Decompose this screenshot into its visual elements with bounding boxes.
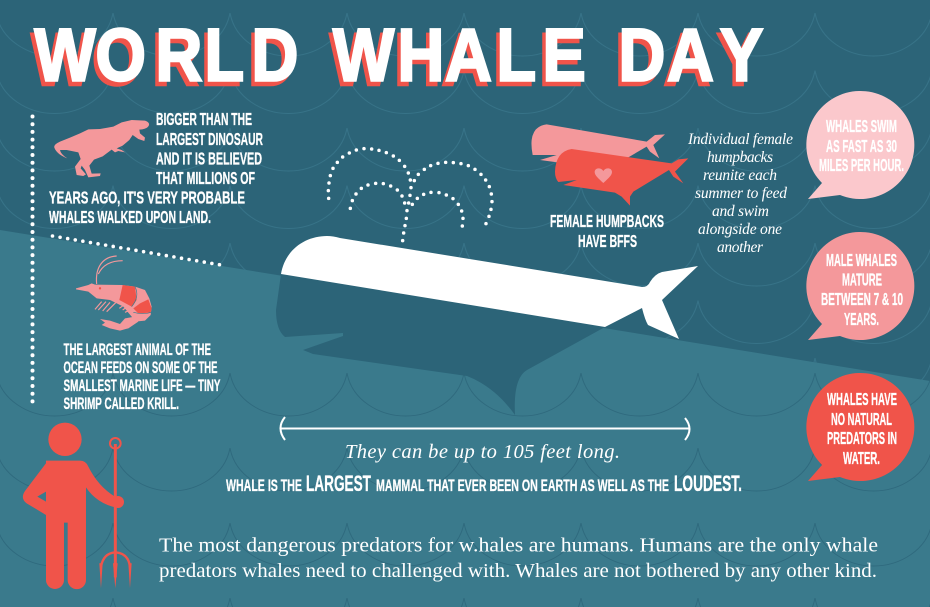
text: dinosaur fact xyxy=(49,109,263,227)
text: dinosaur fact: WHALES WALKED UPON LAND. xyxy=(49,207,211,227)
text: dinosaur fact: BIGGER THAN THE xyxy=(156,109,252,129)
bubble: maturity xyxy=(806,232,914,340)
text: largest mammal line: LARGEST xyxy=(306,471,371,496)
icon: two whales with heart xyxy=(531,124,688,206)
text: italic humpback note: reunite each xyxy=(703,167,777,184)
bubble: no predators xyxy=(806,373,914,481)
whale back and tail xyxy=(281,236,698,339)
text: predators paragraph: predators whales need to challenged with. Whales are not bothered by any other kind. xyxy=(159,560,877,582)
text: dinosaur fact: LARGEST DINOSAUR xyxy=(156,129,263,149)
text: italic humpback note: humpbacks xyxy=(707,149,773,166)
text: krill fact xyxy=(64,341,220,413)
title xyxy=(31,13,763,101)
whale belly xyxy=(276,274,605,415)
text: largest mammal line: MAMMAL THAT EVER BEEN ON EARTH AS WELL AS THE xyxy=(376,477,669,495)
text: italic humpback note: alongside one xyxy=(698,221,782,238)
text: krill fact: THE LARGEST ANIMAL OF THE xyxy=(64,341,211,359)
icon: whale spout xyxy=(328,149,492,241)
text: predators paragraph: The most dangerous predators for w.hales are humans. Humans are the only whale xyxy=(159,534,878,556)
text: largest mammal line xyxy=(226,471,742,496)
title: WHALE xyxy=(333,13,586,97)
text: dinosaur fact: AND IT IS BELIEVED xyxy=(156,148,262,168)
title: DAY xyxy=(615,18,760,101)
text: female humpbacks: FEMALE HUMPBACKS xyxy=(550,211,664,231)
text: italic humpback note: Individual female xyxy=(687,131,793,148)
text: dinosaur fact: YEARS AGO, IT'S VERY PROBABLE xyxy=(49,188,245,208)
text: largest mammal line: WHALE IS THE xyxy=(226,477,302,495)
text: italic humpback note: summer to feed xyxy=(695,185,787,202)
text: krill fact: OCEAN FEEDS ON SOME OF THE xyxy=(64,359,218,377)
text: italic humpback note: another xyxy=(717,239,764,256)
text: krill fact: SHRIMP CALLED KRILL. xyxy=(64,395,179,413)
text: predators paragraph xyxy=(159,534,878,582)
text: largest mammal line: LOUDEST. xyxy=(674,471,742,496)
whale xyxy=(276,236,698,415)
text: length caption: They can be up to 105 feet long. xyxy=(345,441,620,463)
vertical dotted line xyxy=(30,116,34,406)
title: WORLD xyxy=(35,13,298,97)
title: DAY xyxy=(618,13,763,97)
bubble: maturity: MATURE xyxy=(842,270,882,290)
arrow: whale length xyxy=(280,417,690,440)
background: lighter water xyxy=(0,230,930,607)
text: dinosaur fact: THAT MILLIONS OF xyxy=(156,168,255,188)
title: WORLD xyxy=(31,18,295,101)
text: italic humpback note xyxy=(687,131,793,256)
text: krill fact: SMALLEST MARINE LIFE — TINY xyxy=(64,377,220,395)
bubble: no predators: WATER. xyxy=(843,448,880,468)
bubble: maturity: YEARS. xyxy=(844,309,879,329)
icon: human with trident xyxy=(23,423,132,589)
text: italic humpback note: and swim xyxy=(712,203,769,220)
diagonal dotted line xyxy=(52,236,224,266)
text: female humpbacks: HAVE BFFS xyxy=(578,231,637,251)
icon: t-rex xyxy=(54,120,149,177)
icon: shrimp xyxy=(76,256,152,331)
text: female humpbacks xyxy=(550,211,664,251)
bubble: swim speed xyxy=(806,91,914,199)
title: WHALE xyxy=(330,18,582,101)
